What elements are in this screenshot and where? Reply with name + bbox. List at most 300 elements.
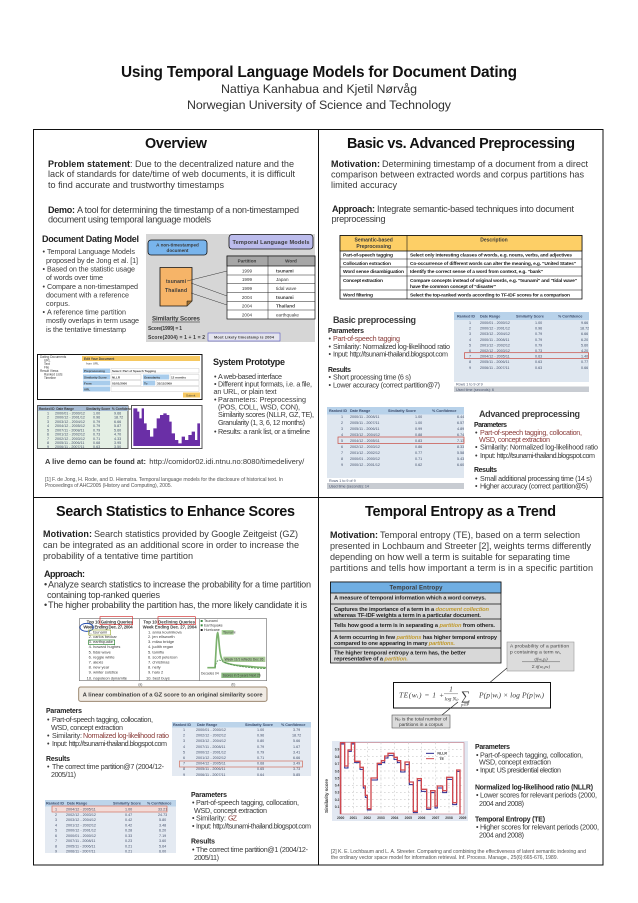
screenshot: basic preprocessing results: 4 [469, 338, 471, 342]
callout: most likely timestamp: Most Likely timestamp is 2004 [214, 336, 275, 340]
formula: temporal entropy: 1 [449, 684, 453, 694]
screenshot: NLLR results: 2003/12 - 2004/12 [196, 739, 226, 743]
screenshot: GZ results: 2003/12 - 2004/12 [66, 818, 96, 822]
screenshot: advanced preprocessing results: 5.43 [457, 457, 464, 461]
system prototype text: Parameters: Preprocessing [218, 395, 306, 404]
screenshot: advanced preprocessing results [327, 407, 464, 489]
approach text [44, 569, 311, 610]
heading: overview: Overview [145, 136, 208, 152]
parameters and results: GZ: Part-of-speech tagging, collocation, [196, 798, 299, 807]
plot: NLLR [437, 752, 447, 756]
screenshot: GZ results: 2004/12 - 2005/11 [66, 808, 96, 812]
screenshot: advanced preprocessing results: 8 [341, 457, 343, 461]
screenshot: NLLR results: 0.96 [257, 734, 264, 738]
screenshot: NLLR results: Similarity Score [245, 723, 273, 727]
system prototype ranked list screenshot: 7 [47, 437, 49, 441]
parameters and results: temporal entropy: 2004 and 2008) [479, 799, 524, 808]
table: partitions and words: 2004 [242, 304, 253, 308]
motivation text: probability of a tentative time partition [43, 551, 193, 561]
table: partitions and words: 2004 [242, 312, 253, 318]
live demo link [45, 457, 305, 466]
system prototype ranked list screenshot: 0.71 [93, 437, 100, 441]
system prototype ranked list screenshot: 2003/12 - 2004/12 [55, 420, 85, 424]
declining queries list: 9. halo 2 [148, 670, 164, 675]
screenshot: basic preprocessing results: 3 [469, 332, 471, 336]
screenshot: basic preprocessing results: 2000/01 - 2000/12 [480, 321, 510, 325]
system prototype ranked list screenshot: 18.72 [114, 416, 123, 420]
table: temporal entropy definition: A measure of temporal information which a word conveys. [334, 596, 486, 602]
screenshot: NLLR results: 5.66 [293, 739, 300, 743]
system prototype ranked list screenshot: 2006/11 - 2007/11 [55, 445, 84, 449]
parameters and results: normalized log-likelihood: 2005/11) [51, 770, 76, 779]
screenshot: NLLR results: 18.72 [292, 734, 301, 738]
screenshot: basic preprocessing results: 2000/12 - 2001/12 [480, 327, 510, 331]
problem statement: : Due to the decentralized nature and the [130, 159, 294, 169]
document dating model text: • [42, 247, 46, 256]
trend chart [201, 619, 266, 678]
label: a non-timestamped document: A non-timestamped [156, 242, 199, 248]
screenshot: basic preprocessing results: 5.60 [581, 343, 588, 347]
screenshot: advanced preprocessing results: 7 [341, 451, 343, 455]
motivation text: Motivation: [330, 530, 378, 540]
parameters and results: temporal entropy: Input: US presidential election [480, 766, 561, 774]
declining queries list: 10. best buys [146, 675, 170, 680]
diagram: temporal language model matching [146, 234, 315, 342]
table: semantic-based preprocessing: Word sense disambiguation [343, 269, 404, 275]
parameters and results: temporal entropy: Parameters [475, 744, 510, 751]
parameters and results: temporal entropy: 2004 and 2008) [479, 830, 524, 840]
arrow: np callout to formula [442, 702, 458, 715]
formula: temporal entropy: p∈P [460, 702, 469, 707]
advanced preprocessing text: Similarity: Normalized log-likelihood ratio [480, 442, 598, 452]
system prototype ranked list screenshot: 4.33 [114, 437, 121, 441]
screenshot: NLLR results: 3.79 [293, 728, 300, 732]
plot: 0.5 [335, 776, 339, 780]
table: temporal entropy definition: compared to one appearing in many partitions. [334, 641, 455, 647]
system prototype form screenshot: 01/01/2000 [112, 382, 127, 386]
system prototype ranked list screenshot: 9 [47, 445, 49, 449]
declining queries list: 2. jen ellsworth [148, 634, 175, 639]
parameters and results: normalized log-likelihood: • [47, 762, 50, 771]
gaining queries list: 4. howard hughes [89, 644, 120, 649]
system prototype form screenshot: File [44, 366, 49, 370]
approach text: Integrate semantic-based techniques into document [377, 204, 574, 214]
basic preprocessing text: Results [328, 367, 351, 374]
screenshot: advanced preprocessing results: 0.83 [415, 439, 422, 443]
demo description: A tool for determining the timestamp of a non-timestamped [77, 205, 299, 215]
trend chart: Hurricane [204, 628, 220, 632]
system prototype form screenshot: Granularity [144, 376, 160, 380]
formula: temporal entropy: ∑ [461, 688, 470, 703]
table: semantic-based preprocessing: Compare concepts instead of original words, e.g. "tsunami" and "tidal wave" [410, 278, 577, 284]
screenshot: GZ results: Similarity Score [113, 802, 141, 806]
table: partitions and words: earthquake [276, 312, 299, 318]
table: partitions and words: 1999 [242, 277, 253, 282]
trend chart: Scores in 5 years Next 26 [223, 674, 261, 678]
gaining queries list: 5. tidal wave [89, 649, 112, 654]
screenshot: advanced preprocessing results: Ranked ID [329, 409, 347, 413]
system prototype ranked list screenshot: 2004/12 - 2005/12 [55, 424, 85, 428]
screenshot: GZ results: 2006/11 - 2007/11 [66, 850, 95, 854]
system prototype text: • [214, 380, 217, 388]
system prototype ranked list screenshot: 2000/12 - 2001/12 [55, 416, 85, 420]
system prototype form screenshot: Timeline [44, 376, 56, 380]
screenshot: NLLR results: 5 [183, 750, 185, 754]
system prototype form screenshot: Dating Documents [40, 355, 67, 359]
parameters and results: normalized log-likelihood: Input: http://tsunami-thailand.blogspot.com [52, 739, 167, 748]
screenshot: GZ results: % Confidence [147, 802, 171, 806]
parameters and results: normalized log-likelihood: Part-of-speech tagging, collocation, [52, 715, 153, 724]
screenshot: NLLR results: 2002/12 - 2002/12 [196, 734, 226, 738]
motivation text [331, 159, 588, 190]
screenshot: advanced preprocessing results: 1 [341, 415, 343, 419]
screenshot: basic preprocessing results: 0.79 [535, 343, 542, 347]
document dating model text: A reference time partition [47, 308, 126, 316]
screenshot: advanced preprocessing results: 2000/11 - 2008/11 [350, 415, 379, 419]
parameters and results: GZ: • [192, 814, 195, 822]
advanced preprocessing text: Advanced preprocessing [479, 409, 580, 419]
document dating model text: mostly overlaps in term usage [46, 316, 139, 325]
trend chart: Earthquake [204, 623, 223, 627]
screenshot: NLLR results: 0.64 [257, 773, 264, 777]
screenshot: basic preprocessing results: 9 [469, 366, 471, 370]
similarity scores: Score(1999) = 1 [148, 326, 182, 332]
screenshot: advanced preprocessing results: 8.33 [457, 445, 464, 449]
system prototype text [213, 357, 314, 436]
screenshot: NLLR results: 8 [183, 767, 185, 771]
authors: Nattiya Kanhabua and Kjetil Nørvåg [221, 82, 417, 96]
advanced preprocessing text: Results [474, 467, 497, 474]
screenshot: basic preprocessing results: 1 [469, 321, 471, 325]
screenshot: NLLR results: 0.65 [257, 767, 264, 771]
advanced preprocessing text: • [475, 451, 478, 460]
screenshot: basic preprocessing results: 0.73 [535, 349, 542, 353]
screenshot: GZ results: 2000/01 - 2000/12 [66, 834, 96, 838]
screenshot: GZ results: 2007/11 - 2008/11 [66, 839, 95, 843]
caption box: A linear combination of a GZ score to an original similarity score [83, 693, 263, 699]
system prototype form screenshot: NLLR [112, 376, 121, 380]
label: a non-timestamped document [148, 240, 207, 255]
screenshot: basic preprocessing results: 9.66 [581, 321, 588, 325]
table: semantic-based preprocessing: Co-occurrence of different words can alter the meaning, e.g. "United States" [410, 261, 576, 267]
callout: most likely timestamp [208, 333, 280, 341]
basic preprocessing text: Basic preprocessing [333, 315, 416, 325]
declining queries list: Top 10 Declining Queries [143, 619, 196, 624]
motivation text: comparison between extracted words and corpus partitions has [331, 170, 584, 180]
system prototype form screenshot [38, 354, 202, 400]
screenshot: NLLR results: 0.79 [257, 745, 264, 749]
screenshot: NLLR results: 6 [183, 756, 185, 760]
screenshot: advanced preprocessing results: 2001/12 - 2002/12 [350, 451, 380, 455]
heading: search statistics: Search Statistics to Enhance Scores [56, 504, 295, 520]
approach text: • [44, 580, 47, 590]
screenshot: GZ results: 2002/12 - 2003/12 [66, 813, 96, 817]
system prototype ranked list screenshot: 2 [47, 416, 49, 420]
screenshot: GZ results: 0.33 [125, 834, 132, 838]
parameters and results: temporal entropy [475, 744, 599, 840]
screenshot: NLLR results: 2004/12 - 2005/11 [196, 762, 226, 766]
table: temporal entropy definition [330, 582, 501, 663]
screenshot: advanced preprocessing results: 0.86 [415, 445, 422, 449]
screenshot: basic preprocessing results: 0.96 [535, 327, 542, 331]
screenshot: GZ results [45, 800, 176, 854]
trend chart: Tsunami [223, 631, 236, 635]
panel: search statistics [43, 504, 311, 862]
motivation text: partitions and tells how important a term is in a specific partition [330, 563, 593, 573]
screenshot: basic preprocessing results: 0.79 [535, 338, 542, 342]
system prototype text: • [214, 372, 217, 381]
document dating model text: proposed by de Jong et al. [1] [46, 256, 138, 265]
document dating model text: of words over time [46, 273, 103, 282]
document dating model text [42, 234, 139, 334]
screenshot: basic preprocessing results [454, 312, 589, 392]
screenshot: basic preprocessing results: 1.40 [581, 355, 588, 359]
system prototype ranked list screenshot: 0.79 [93, 420, 100, 424]
screenshot: basic preprocessing results: 6 [469, 349, 471, 353]
screenshot: NLLR results: % Confidence [281, 723, 305, 727]
callout: np definition: Nₚ is the total number of [395, 716, 448, 722]
reference 1: [1] F. de Jong, H. Rode, and D. Hiemstra. Temporal language models for the disclosure of historical text. In [45, 477, 283, 483]
parameters and results: temporal entropy: Normalized log-likelihood ratio (NLLR) [475, 784, 593, 792]
system prototype ranked list screenshot: 5.87 [114, 424, 121, 428]
screenshot: advanced preprocessing results: 5.58 [457, 451, 464, 455]
document dating model text: • [42, 264, 46, 274]
basic preprocessing text: Part-of-speech tagging [333, 334, 400, 343]
motivation text: limited accuracy [331, 180, 397, 190]
table: temporal entropy definition: Tells how good a term is in separating a partition from others. [334, 623, 495, 629]
gaining queries list: 6. reggie white [89, 654, 115, 659]
callout: np definition [392, 715, 450, 728]
screenshot: basic preprocessing results: 2 [469, 327, 471, 331]
basic preprocessing text: • [328, 350, 332, 358]
screenshot: basic preprocessing results: % Confidence [558, 314, 582, 318]
screenshot: advanced preprocessing results: 2005/11 - 2006/11 [350, 427, 379, 431]
screenshot: basic preprocessing results: 8 [469, 360, 471, 364]
parameters and results: GZ: Parameters [191, 792, 227, 799]
label: temporal language models [229, 234, 313, 249]
system prototype text: • [214, 395, 217, 404]
arrow: probability callout to formula [481, 668, 507, 690]
callout: np definition: partitions in a corpus [399, 722, 444, 728]
table: partitions and words: tidal wave [276, 286, 297, 291]
table: semantic-based preprocessing: Concept extraction [343, 278, 383, 284]
advanced preprocessing text: • [475, 474, 478, 483]
system prototype ranked list screenshot: 5.60 [114, 428, 121, 432]
parameters and results: normalized log-likelihood: Similarity: [52, 731, 82, 740]
document dating model text: is the tentative timestamp [46, 325, 126, 334]
plot: 2007 [432, 816, 440, 820]
system prototype form screenshot: URL [84, 388, 90, 392]
table: partitions and words: Word [285, 258, 297, 264]
parameters and results: temporal entropy: Part-of-speech tagging, collocation, [480, 750, 583, 760]
parameters and results: GZ: GZ [228, 814, 238, 822]
screenshot: GZ results: Date Range [67, 802, 87, 806]
parameters and results: normalized log-likelihood: WSD, concept extraction [51, 723, 123, 732]
screenshot: NLLR results: 5.85 [293, 773, 300, 777]
screenshot: NLLR results: Ranked ID [173, 723, 191, 727]
system prototype ranked list screenshot [38, 406, 133, 449]
caption box [79, 687, 267, 701]
screenshot: NLLR results: 2001/12 - 2002/12 [196, 756, 226, 760]
screenshot: GZ results: 3.48 [159, 823, 166, 827]
screenshot: advanced preprocessing results: 5 [341, 439, 343, 443]
screenshot: basic preprocessing results: 0.79 [535, 332, 542, 336]
system prototype ranked list screenshot: 2001/12 - 2002/12 [55, 433, 85, 437]
screenshot: advanced preprocessing results: 0.88 [415, 433, 422, 437]
table: partitions and words [227, 256, 315, 319]
screenshot: basic preprocessing results: 7 [469, 355, 471, 359]
screenshot: basic preprocessing results: 6.20 [581, 338, 588, 342]
parameters and results: temporal entropy: • [476, 750, 479, 760]
screenshot: GZ results: 2 [55, 813, 57, 817]
plot: 0.2 [335, 798, 339, 802]
screenshot: GZ results: 0.23 [125, 839, 132, 843]
table: temporal entropy definition: representative of a partition. [334, 656, 408, 662]
icon: document with words [160, 268, 192, 306]
reference 1: Proceedings of AHC2005 (History and Computing), 2005. [45, 483, 172, 489]
system prototype form screenshot: Ranked Lists [44, 372, 63, 376]
system prototype ranked list screenshot: 3.95 [114, 441, 121, 445]
screenshot: advanced preprocessing results: 2002/12 - 2003/12 [350, 445, 380, 449]
callout: probability of a partition: tf(wᵢ,pⱼ) [534, 656, 548, 662]
declining queries list: 4. judith regan [148, 644, 173, 649]
table: partitions and words: Japan [276, 277, 289, 282]
system prototype text: A web-based interface [218, 372, 282, 381]
screenshot: advanced preprocessing results: 6 [341, 445, 343, 449]
trend chart: Tsunami [204, 619, 218, 623]
system prototype ranked list screenshot: 2002/12 - 2003/12 [55, 437, 85, 441]
system prototype ranked list screenshot: 4.70 [114, 433, 121, 437]
system prototype text: Similarity scores (NLLR, GZ, TE), [218, 410, 314, 419]
system prototype ranked list screenshot: 5 [47, 428, 49, 432]
screenshot: GZ results: Ranked ID [46, 802, 64, 806]
gaining queries list: 7. alexis [89, 659, 103, 664]
system prototype text: • [214, 427, 217, 436]
screenshot: basic preprocessing results: 1.00 [535, 321, 542, 325]
parameters and results: GZ: • [192, 798, 195, 807]
system prototype ranked list screenshot: 1 [47, 412, 49, 416]
screenshot: basic preprocessing results: 0.63 [535, 366, 542, 370]
label: temporal language models: Temporal Language Models [232, 240, 310, 246]
problem statement: Problem statement [48, 159, 130, 169]
screenshot: advanced preprocessing results: 3 [341, 427, 343, 431]
advanced preprocessing text: • [475, 442, 478, 452]
screenshot: basic preprocessing results: 0.63 [535, 360, 542, 364]
table: semantic-based preprocessing: Select the top-ranked words according to TF-IDF scores for a comparison [410, 292, 570, 298]
screenshot: NLLR results: 1.00 [257, 728, 264, 732]
advanced preprocessing text: WSD, concept extraction [479, 435, 550, 444]
screenshot: advanced preprocessing results: % Confidence [432, 409, 456, 413]
system prototype form screenshot: 31/11/2009 [157, 382, 172, 386]
system prototype ranked list screenshot: 3 [47, 420, 49, 424]
screenshot: advanced preprocessing results: 0.99 [415, 427, 422, 431]
system prototype ranked list screenshot: 3.50 [114, 445, 121, 449]
screenshot: advanced preprocessing results: 9 [341, 463, 343, 467]
table: semantic-based preprocessing: have the common concept of "disaster" [410, 284, 496, 290]
y axis label: Similarity score [324, 779, 330, 813]
declining queries list: 5. tamiflu [148, 649, 164, 654]
screenshot: GZ results: 6.00 [159, 850, 166, 854]
screenshot: basic preprocessing results: Similarity Score [516, 314, 544, 318]
table: temporal entropy definition: Captures the importance of a term in a document collection [334, 607, 490, 613]
figure: google zeitgeist queries and timeline [79, 617, 267, 701]
system prototype timeline chart [132, 406, 202, 448]
screenshot: basic preprocessing results: 0.77 [581, 360, 588, 364]
screenshot: basic preprocessing results: 6.66 [581, 332, 588, 336]
label: a non-timestamped document: document [167, 248, 189, 253]
motivation text: Search statistics provided by Google Zeitgeist (GZ) [94, 529, 298, 539]
screenshot: basic preprocessing results: Date Range [480, 314, 500, 318]
screenshot: GZ results: 1.00 [125, 808, 132, 812]
screenshot: GZ results: 24.73 [158, 813, 167, 817]
screenshot: basic preprocessing results: Ranked ID [457, 314, 475, 318]
declining queries list: 8. nelly [148, 665, 161, 670]
system prototype ranked list screenshot: 2007/11 - 2008/11 [55, 428, 84, 432]
system prototype ranked list screenshot: Ranked ID Date Range [39, 407, 74, 411]
formula: temporal entropy: log Nₚ [444, 696, 459, 702]
screenshot: advanced preprocessing results: Used time (seconds): 14 [329, 484, 369, 488]
plot: 0.1 [335, 805, 339, 809]
approach text [332, 204, 574, 224]
poster frame with four panels [34, 130, 603, 865]
reference 2: the ordinary vector space model for information retrieval. Inf. Process. Manage., 25(6):665-676, 1989. [331, 855, 558, 861]
screenshot: NLLR results: 3.49 [293, 762, 300, 766]
system prototype form screenshot: 12 months [171, 376, 186, 380]
parameters and results: normalized log-likelihood: The correct time partition@7 (2004/12- [52, 762, 165, 771]
screenshot: basic preprocessing results: 2002/12 - 2003/12 [480, 349, 510, 353]
panel: basic vs advanced preprocessing [327, 136, 598, 490]
system prototype form screenshot: URL [44, 358, 51, 362]
screenshot: advanced preprocessing results: 0.77 [415, 451, 422, 455]
screenshot: advanced preprocessing results: 7.13 [457, 439, 464, 443]
advanced preprocessing text: Part-of-speech tagging, collocation, [480, 428, 582, 437]
table: temporal entropy definition: Temporal Entropy [390, 586, 443, 592]
screenshot: basic preprocessing results: 0.63 [535, 355, 542, 359]
screenshot: NLLR results: 7 [183, 762, 185, 766]
system prototype ranked list screenshot: 0.96 [93, 416, 100, 420]
system prototype ranked list screenshot: 6 [47, 433, 49, 437]
advanced preprocessing text [474, 409, 598, 490]
screenshot: GZ results: 5.80 [159, 818, 166, 822]
parameters and results: GZ: Results [191, 838, 215, 846]
screenshot: NLLR results: 2006/11 - 2007/11 [196, 773, 225, 777]
screenshot: advanced preprocessing results: 4 [341, 433, 343, 437]
heading: basic vs advanced: Basic vs. Advanced Preprocessing [347, 136, 575, 152]
parameters and results: temporal entropy: • [476, 790, 479, 800]
screenshot: GZ results: 7 [55, 839, 57, 843]
callout: probability of a partition: p containing a term wᵢ, [510, 650, 561, 656]
system prototype form screenshot: To [144, 382, 148, 386]
live demo link: A live demo can be found at: [45, 457, 146, 466]
parameters and results: normalized log-likelihood: Normalized log-likelihood ratio [83, 731, 169, 740]
gaining queries list: 2. carlos beckar [89, 634, 117, 639]
advanced preprocessing text: • [475, 482, 478, 490]
gaining queries list: 9. winter solstice [89, 670, 119, 675]
system prototype text: an URL, or plain text [214, 387, 276, 396]
system prototype form screenshot: Submit [186, 394, 196, 398]
declining queries list: 1. anna kournikova [148, 629, 182, 634]
screenshot: advanced preprocessing results: 6.44 [457, 415, 464, 419]
table: partitions and words: 2004 [242, 295, 253, 300]
advanced preprocessing text: • [475, 428, 478, 437]
problem statement: to find accurate and trustworthy timestamps [48, 180, 224, 190]
parameters and results: normalized log-likelihood: Results [46, 756, 70, 763]
system prototype text: Results: a rank list, or a timeline [218, 427, 310, 436]
formula: temporal entropy [394, 682, 550, 708]
panel: overview [38, 136, 315, 489]
parameters and results: GZ: WSD, concept extraction [194, 806, 267, 815]
screenshot: NLLR results: 2007/11 - 2008/11 [196, 745, 225, 749]
